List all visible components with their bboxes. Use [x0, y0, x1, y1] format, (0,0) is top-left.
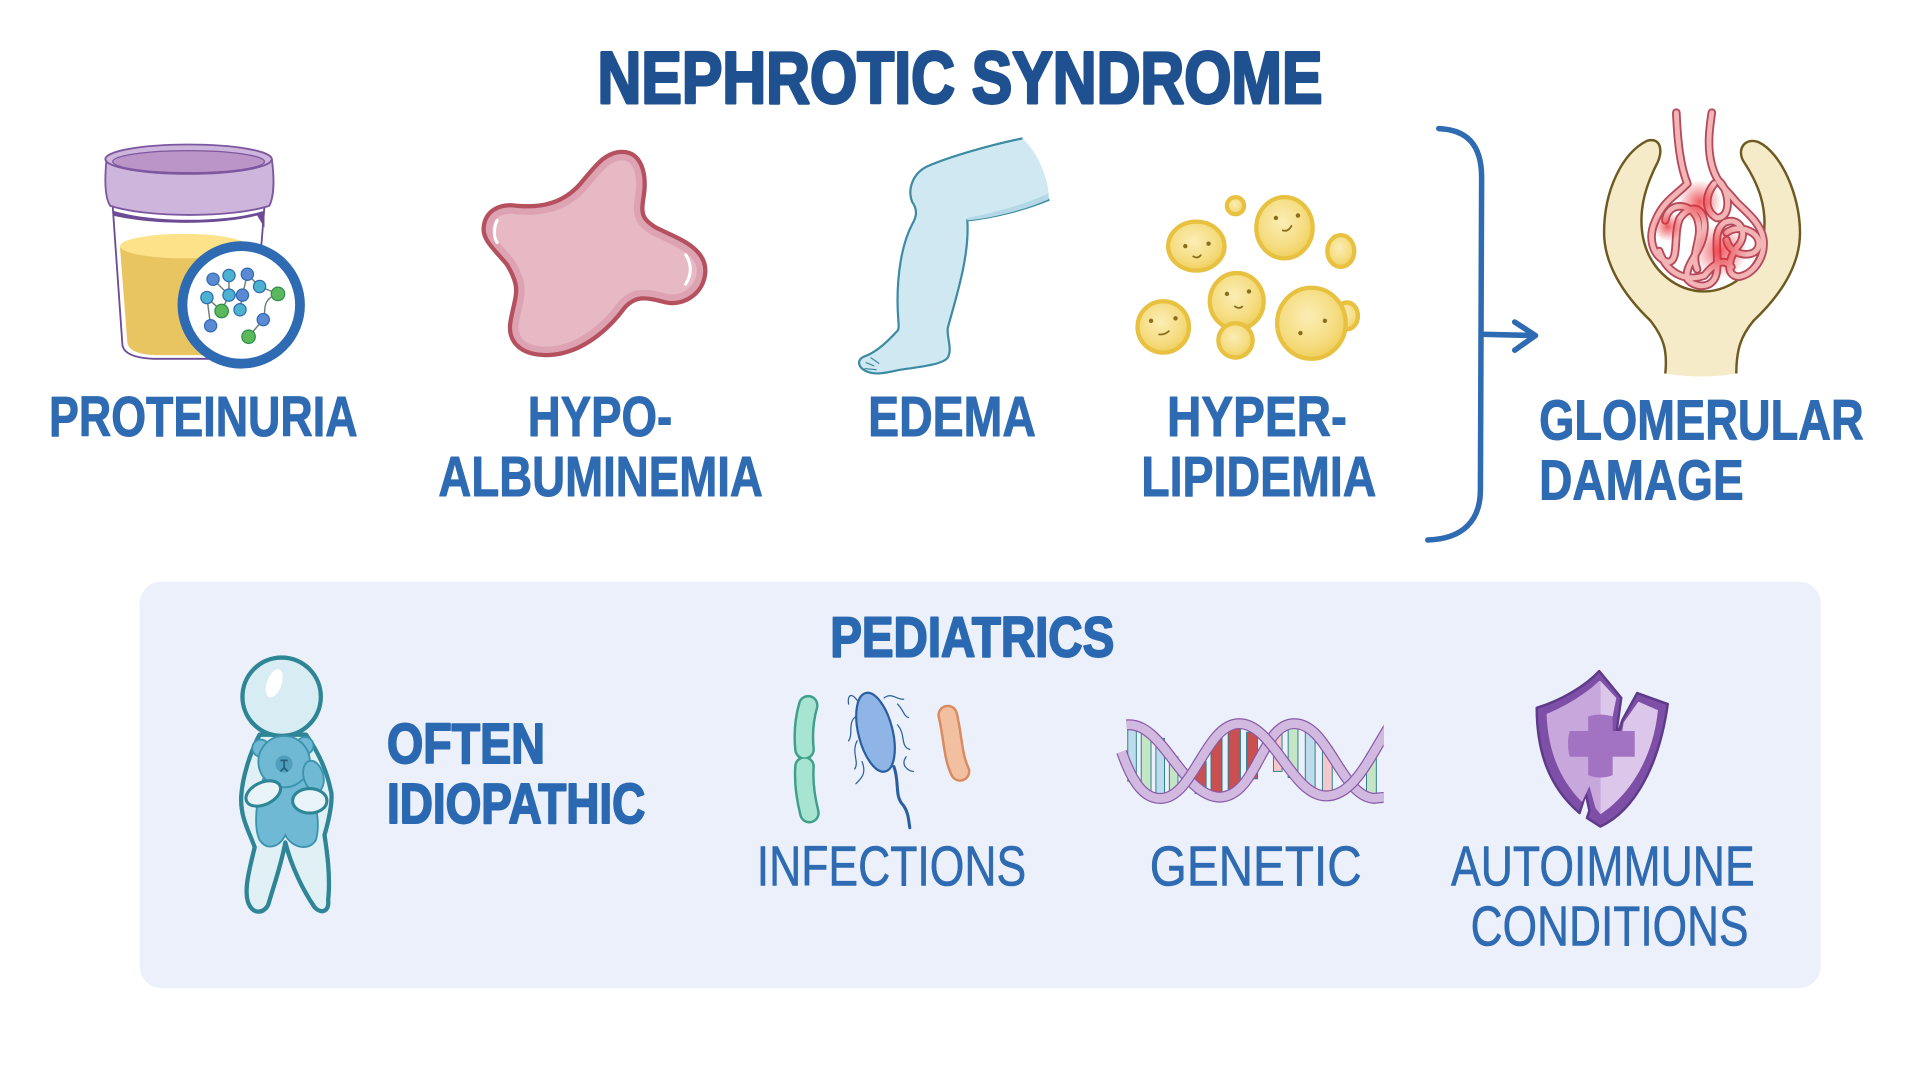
label: hypoalbuminemia — [438, 385, 763, 508]
label: hyperlipidemia: HYPER- — [1167, 385, 1347, 448]
icon: albumin blob — [484, 152, 705, 355]
label: hypoalbuminemia: ALBUMINEMIA — [438, 445, 763, 508]
panel: pediatrics — [140, 582, 1821, 988]
heading: pediatrics: PEDIATRICS — [830, 605, 1114, 668]
label: glomerular damage — [1539, 389, 1864, 512]
title: NEPHROTIC SYNDROME — [598, 36, 1322, 119]
label: autoimmune conditions: AUTOIMMUNE — [1451, 834, 1755, 897]
icon: fat droplets — [1138, 197, 1358, 359]
arrow to glomerular damage — [1482, 322, 1536, 350]
icon: child with teddy bear — [241, 658, 332, 912]
label: infections: INFECTIONS — [757, 834, 1026, 897]
label: glomerular damage: DAMAGE — [1539, 449, 1744, 512]
icon: bacteria — [804, 689, 960, 828]
label: hyperlipidemia: LIPIDEMIA — [1141, 445, 1376, 508]
label: proteinuria: PROTEINURIA — [49, 385, 358, 448]
label: hyperlipidemia — [1141, 385, 1376, 508]
label: autoimmune conditions: CONDITIONS — [1471, 894, 1749, 957]
label: genetic: GENETIC — [1150, 834, 1362, 897]
label: often idiopathic: IDIOPATHIC — [387, 772, 645, 835]
label: often idiopathic: OFTEN — [387, 712, 545, 775]
label: autoimmune conditions — [1451, 834, 1755, 957]
label: hypoalbuminemia: HYPO- — [528, 385, 672, 448]
icon: DNA helix — [1122, 724, 1389, 798]
icon: swollen leg — [859, 138, 1049, 373]
label: often idiopathic — [387, 712, 645, 835]
icon: damaged glomerulus — [1604, 113, 1800, 377]
icon: urine cup with protein magnifier — [105, 144, 300, 364]
icon: cracked shield — [1537, 671, 1668, 827]
label: edema: EDEMA — [868, 385, 1036, 448]
bracket grouping the four findings — [1428, 129, 1482, 540]
